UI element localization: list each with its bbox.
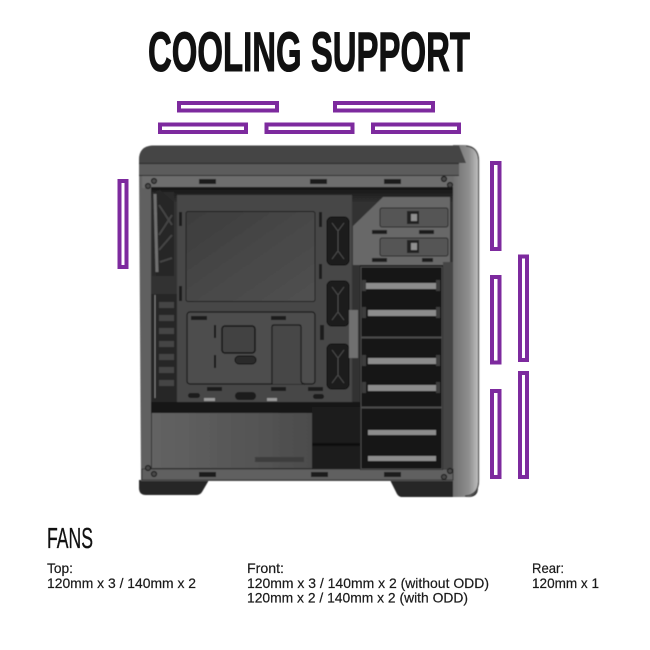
specs: rear: Rear:	[532, 560, 564, 576]
top panel	[139, 146, 466, 163]
bottom rail slots	[199, 472, 401, 477]
specs: front: 120mm x 2 / 140mm x 2 (with ODD)	[247, 590, 468, 606]
case side edge	[453, 145, 480, 497]
ODD tray upper	[380, 208, 448, 227]
ODD bay slots	[372, 230, 434, 262]
tray highlights	[204, 398, 277, 401]
marker: rear	[120, 181, 126, 267]
tray slots	[179, 212, 324, 400]
marker: second row middle	[266, 124, 352, 132]
rear fan	[152, 190, 174, 276]
ODD bay	[353, 197, 450, 265]
upper rail slots	[199, 179, 401, 184]
fan position markers	[120, 103, 527, 477]
specs: front: 120mm x 3 / 140mm x 2 (without ODD)	[247, 575, 489, 591]
marker: front inner top	[492, 163, 500, 249]
specs: top: 120mm x 3 / 140mm x 2	[47, 575, 196, 591]
specs: top: Top:	[47, 560, 73, 576]
drive cage column	[360, 265, 443, 470]
marker: second row right	[373, 124, 459, 132]
upper rail	[142, 176, 453, 188]
grommet patterns	[332, 223, 344, 383]
specs: front	[247, 560, 489, 606]
case frame	[139, 146, 459, 481]
marker: front outer bottom	[520, 373, 527, 477]
divider bar	[349, 310, 358, 358]
specs: top	[47, 560, 196, 591]
bottom rail	[142, 469, 453, 480]
corner screws	[146, 176, 452, 480]
marker: top row left	[179, 103, 277, 110]
expansion slots	[151, 294, 177, 402]
computer case	[139, 145, 480, 497]
marker: second row left	[160, 124, 246, 132]
ODD tray lower	[380, 238, 448, 256]
lower tray plate	[187, 312, 315, 384]
interior	[151, 187, 453, 470]
top tray cutout	[186, 212, 315, 302]
marker: front inner middle	[492, 277, 500, 362]
specs: front: Front:	[247, 560, 284, 576]
heading: fans: FANS	[47, 523, 93, 555]
motherboard tray	[177, 195, 352, 402]
right inner wall	[443, 262, 453, 469]
case feet	[139, 480, 478, 497]
marker: front inner bottom	[492, 391, 500, 477]
specs: rear: 120mm x 1	[532, 575, 599, 591]
marker: front outer top	[520, 256, 527, 360]
cable grommets	[327, 217, 349, 389]
drive rails	[364, 283, 437, 461]
drive rail ends	[362, 280, 440, 393]
PSU shroud	[151, 402, 362, 469]
specs: rear	[532, 560, 599, 591]
drive cage lines	[361, 267, 442, 469]
marker: top row right	[335, 103, 433, 110]
